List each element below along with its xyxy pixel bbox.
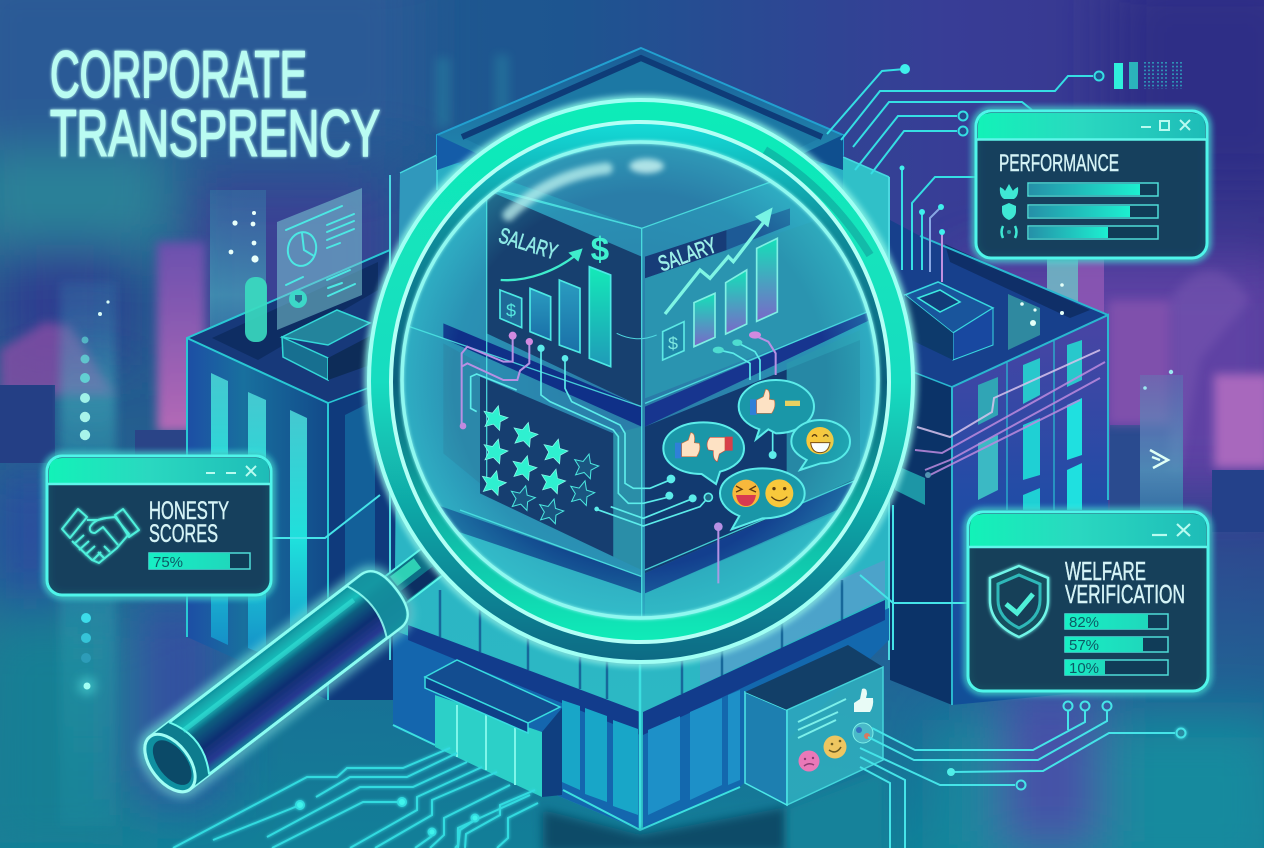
- ground shadow: [543, 770, 885, 848]
- icon: handshake: [62, 509, 139, 563]
- panel: performance: [976, 111, 1207, 258]
- title: [50, 37, 380, 170]
- glass windows under the lens: [440, 560, 885, 699]
- bar 57%: 57%: [1069, 637, 1099, 654]
- bars: [1028, 183, 1158, 239]
- purple traces: [460, 331, 776, 583]
- lower wall bands: [393, 600, 889, 830]
- bar 10%: 10%: [1069, 660, 1099, 677]
- neck: [378, 543, 450, 609]
- panel: honesty scores: [47, 456, 271, 595]
- panel: welfare verification: [968, 512, 1208, 691]
- lens inner rim: [402, 142, 878, 618]
- end cap: [135, 716, 217, 801]
- bar 10%: [1065, 660, 1168, 677]
- window controls: [1152, 524, 1190, 536]
- speech bubble: thumbs up and down: [663, 422, 744, 484]
- rooftop box: [905, 282, 993, 360]
- connector lines to panels: [271, 495, 968, 650]
- thumbs up: [854, 689, 873, 712]
- sad face: [798, 750, 820, 772]
- badge: [853, 723, 873, 743]
- bar 82%: [1065, 614, 1168, 631]
- glass highlights: [508, 159, 664, 215]
- left salary chart: SALARY: [496, 223, 561, 265]
- icon: shield check: [990, 566, 1048, 637]
- circuit traces: bottom right: [860, 702, 1186, 848]
- floating dashboard with pie chart: [277, 188, 362, 330]
- right salary chart: SALARY: [655, 232, 720, 276]
- panel: honesty scores: SCORES: [149, 520, 218, 548]
- roof: [437, 48, 843, 240]
- collar band: [347, 563, 416, 638]
- bar 82%: 82%: [1069, 614, 1099, 631]
- bar 75%: [149, 553, 250, 571]
- left salary chart: $: [506, 301, 516, 321]
- building: right: [890, 220, 1173, 705]
- bar 75%: 75%: [153, 554, 183, 571]
- circuit traces: top right: [827, 64, 1104, 282]
- magnifying lens rings: [369, 100, 913, 662]
- mini signal bars: top right: [1114, 62, 1181, 89]
- white particles: [1020, 283, 1173, 468]
- speech bubble: laughing and smiling faces: [720, 468, 805, 529]
- central tower: [390, 48, 889, 848]
- left salary chart: [496, 223, 611, 367]
- bar 57%: [1065, 637, 1168, 654]
- building: left: [187, 250, 395, 700]
- rooftop box: [282, 310, 370, 380]
- glowing pill and particles: [229, 211, 267, 342]
- panel: welfare verification: VERIFICATION: [1065, 579, 1185, 609]
- heading: PERFORMANCE: [999, 150, 1119, 177]
- window controls: [206, 466, 256, 476]
- window controls: [1141, 120, 1190, 130]
- title: TRANSPRENCY: [50, 96, 380, 170]
- right salary chart: $: [668, 333, 678, 353]
- tube: [135, 563, 416, 801]
- circuit traces: bottom left: [173, 748, 538, 848]
- magnifying glass handle: [135, 530, 460, 801]
- speech bubble: thumbs up and dash: [739, 380, 814, 439]
- interior structure: [410, 144, 868, 616]
- happy face: [824, 736, 846, 758]
- speech bubble: grinning face: [791, 420, 850, 470]
- dots rising on the left: [78, 300, 110, 695]
- review kiosk box: [745, 645, 883, 805]
- right salary chart: [617, 207, 777, 360]
- lens: magnified building interior: [400, 137, 880, 650]
- title: CORPORATE: [50, 37, 307, 111]
- entrance canopy: [425, 660, 562, 797]
- heading: HONESTY: [149, 497, 229, 525]
- star ratings: [479, 403, 601, 525]
- teal traces: [471, 339, 777, 526]
- left salary chart: $: [591, 232, 610, 269]
- heading: WELFARE: [1065, 556, 1146, 586]
- purple signal lines: [915, 350, 1105, 478]
- row icons: [1000, 184, 1018, 238]
